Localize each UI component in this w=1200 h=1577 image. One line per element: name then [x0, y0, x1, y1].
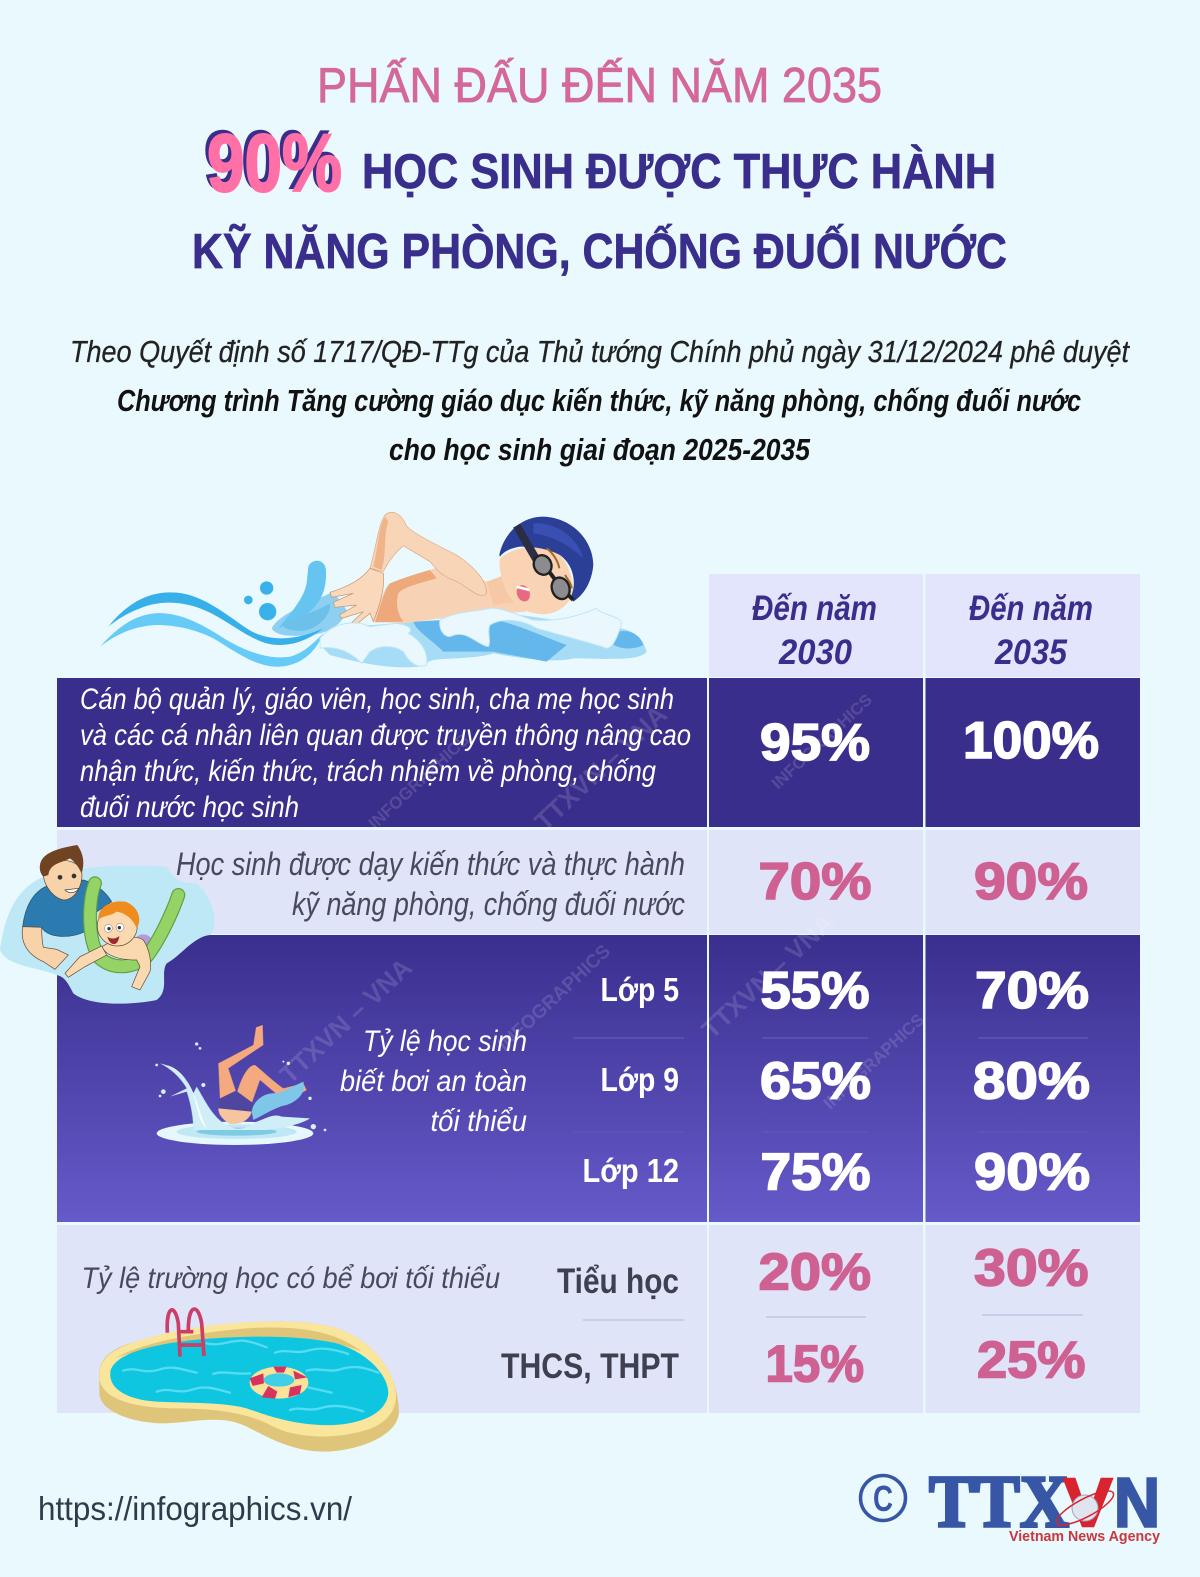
- value 2035: 90%: [974, 853, 1088, 911]
- school level labels: THCS, THPT: [501, 1347, 679, 1386]
- school level labels: Tiểu học: [557, 1262, 679, 1301]
- swimmer figure and water: [320, 512, 647, 667]
- value 2030: 95%: [760, 714, 870, 772]
- heading: 90 percent highlight: 90%: [204, 115, 339, 206]
- grade labels: [582, 971, 679, 1189]
- grade labels: Lớp 5: [600, 971, 679, 1008]
- table header: 2030: [709, 574, 923, 677]
- skills description: [176, 846, 685, 922]
- logo: TTXVN: [929, 1462, 1161, 1545]
- watermarks: INFOGRAPHICS: [494, 941, 615, 1056]
- logo: copyright: C: [873, 1478, 893, 1519]
- values 2035: 30%: [974, 1240, 1088, 1298]
- illustration: father and child in water: [0, 845, 215, 1004]
- values 2030: 20%: [758, 1244, 871, 1302]
- grade labels: Lớp 12: [582, 1152, 679, 1189]
- value 2035: 100%: [963, 712, 1099, 770]
- swimming rate description: Tỷ lệ học sinh: [363, 1025, 527, 1058]
- table header: 2030: Đến năm: [752, 589, 877, 628]
- values 2030: [758, 1244, 871, 1394]
- illustration: diver splash: [155, 1025, 326, 1145]
- panel: school pool row: [57, 1225, 1140, 1413]
- table header: 2035: [926, 574, 1140, 677]
- heading: 90 percent highlight: 90%: [207, 118, 342, 209]
- heading: line three: KỸ NĂNG PHÒNG, CHỐNG ĐUỐI NƯỚC: [192, 224, 1007, 279]
- table header: 2035: 2035: [994, 633, 1067, 672]
- values 2035: 80%: [973, 1052, 1090, 1110]
- values 2030: 55%: [760, 962, 870, 1020]
- values 2035: 70%: [975, 962, 1089, 1020]
- watermarks: [274, 690, 928, 1113]
- footer url: https://infographics.vn/: [38, 1490, 353, 1527]
- panel: practical skills row: [57, 830, 1140, 934]
- logo: TTXVN: N: [1114, 1464, 1160, 1542]
- awareness description: [80, 683, 691, 824]
- table header: 2035: Đến năm: [969, 589, 1093, 628]
- skills description: kỹ năng phòng, chống đuối nước: [292, 886, 685, 922]
- heading: line two: HỌC SINH ĐƯỢC THỰC HÀNH: [362, 145, 996, 199]
- watermarks: INFOGRAPHICS: [365, 730, 473, 833]
- logo: TTXVN: V: [1063, 1464, 1113, 1542]
- values 2035: 25%: [977, 1332, 1086, 1390]
- values 2030: 75%: [760, 1144, 870, 1202]
- grade labels: Lớp 9: [600, 1061, 679, 1098]
- values 2030: 15%: [766, 1336, 864, 1394]
- school level labels: [501, 1262, 679, 1386]
- logo: copyright: [860, 1476, 906, 1520]
- values 2035: [973, 962, 1090, 1202]
- watermarks: INFOGRAPHICS: [820, 1010, 928, 1113]
- swimming rate description: tối thiểu: [430, 1105, 527, 1138]
- values 2035: 90%: [974, 1144, 1090, 1202]
- skills description: Học sinh được dạy kiến thức và thực hành: [176, 846, 685, 882]
- pool description: Tỷ lệ trường học có bể bơi tối thiểu: [82, 1262, 500, 1295]
- awareness description: Cán bộ quản lý, giáo viên, học sinh, cha mẹ học sinh: [80, 683, 674, 716]
- awareness description: nhận thức, kiến thức, trách nhiệm về phòng, chống: [80, 755, 656, 788]
- illustration: swimming pool: [99, 1309, 399, 1452]
- watermarks: TTXVN – VNA: [696, 907, 840, 1044]
- swimming rate description: biết bơi an toàn: [340, 1065, 527, 1098]
- logo: TTXVN: Vietnam News Agency: [1009, 1528, 1161, 1545]
- watermarks: TTXVN – VNA: [274, 952, 418, 1089]
- awareness description: đuối nước học sinh: [80, 791, 299, 824]
- values 2030: 65%: [760, 1052, 871, 1110]
- panel: swimming rate row: [57, 935, 1140, 1222]
- panel: awareness row: [57, 678, 1140, 827]
- swimming rate description: [340, 1025, 527, 1138]
- values 2030: [760, 962, 871, 1202]
- values 2035: [974, 1240, 1088, 1390]
- logo: TTXVN: TTX: [929, 1462, 1069, 1544]
- waves and droplets: [100, 561, 347, 667]
- table header: 2030: 2030: [778, 633, 852, 672]
- watermarks: TTXVN – VNA: [529, 699, 673, 836]
- awareness description: và các cá nhân liên quan được truyền thông nâng cao: [80, 719, 691, 752]
- title: target year: PHẤN ĐẤU ĐẾN NĂM 2035: [317, 59, 882, 113]
- illustration: swimmer: [100, 512, 647, 667]
- intro text block: cho học sinh giai đoạn 2025-2035: [389, 432, 811, 467]
- value 2030: 70%: [758, 853, 872, 911]
- intro text block: [70, 334, 1130, 467]
- watermarks: INFOGRAPHICS: [768, 690, 876, 793]
